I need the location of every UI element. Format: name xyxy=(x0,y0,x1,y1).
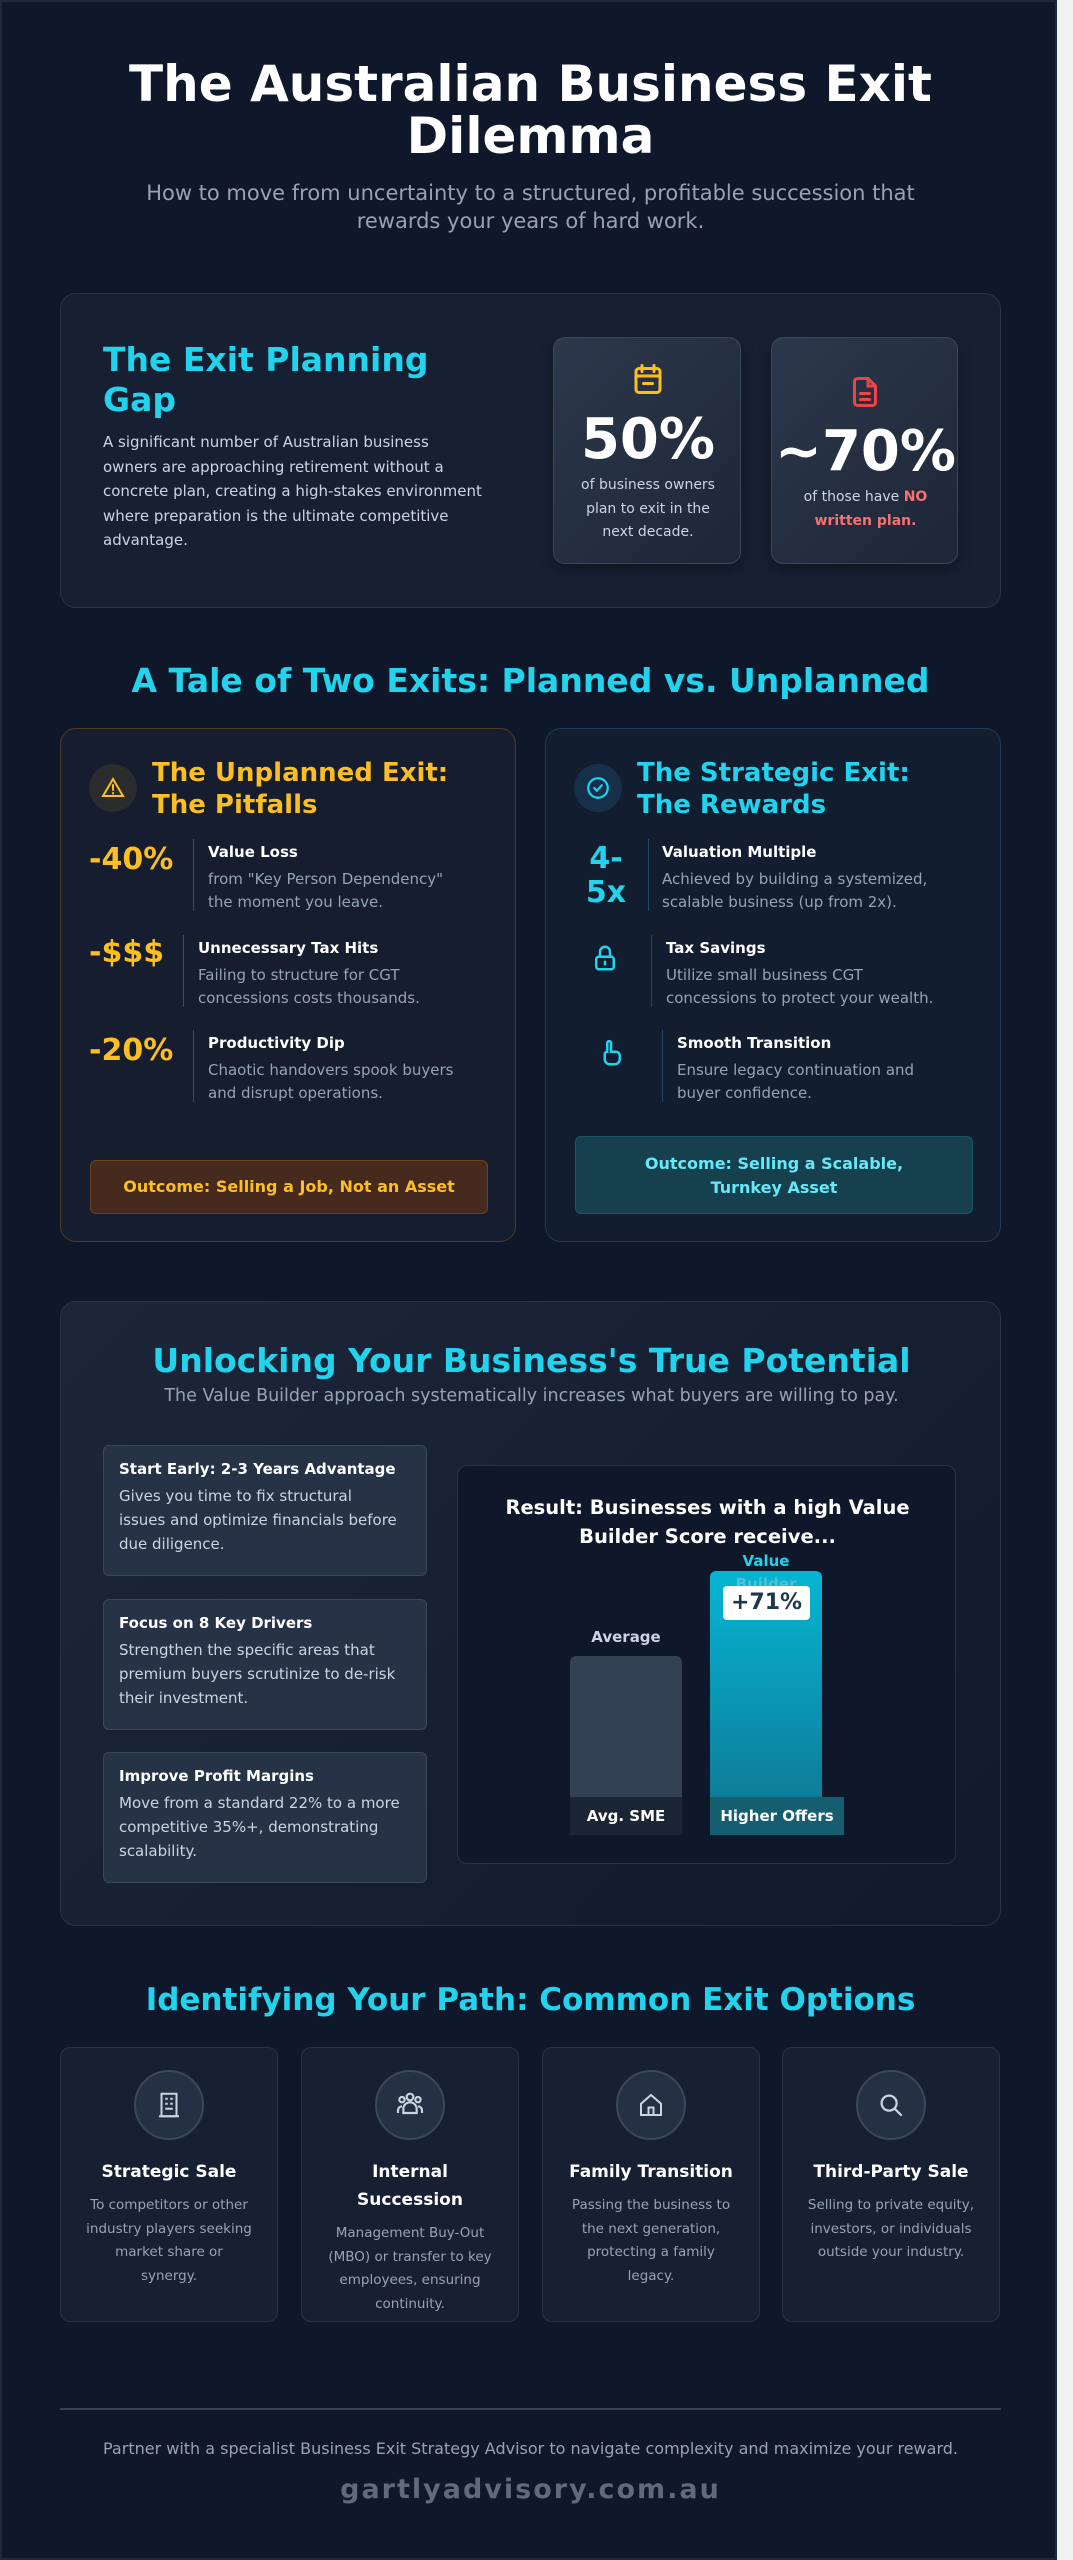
heading: exit planning gap: The Exit Planning xyxy=(103,340,428,379)
card: internal succession: Management Buy-Out (MBO) or transfer to key employees, ensuring continuity. xyxy=(328,2225,492,2312)
callout: outcome unplanned xyxy=(90,1160,488,1214)
card: key drivers: Strengthen the specific areas that premium buyers scrutinize to de-risk their investment. xyxy=(119,1641,395,1707)
item: value loss: Value Loss xyxy=(208,843,298,861)
item: valuation multiple: 4- xyxy=(589,841,623,876)
title: The Australian Business Exit xyxy=(129,55,932,113)
stat card: ~70%: ~70% xyxy=(775,419,956,484)
icon: calendar xyxy=(634,364,662,394)
heading: exit options: Identifying Your Path: Common Exit Options xyxy=(146,1982,915,2018)
card: third-party sale: investors, or individuals xyxy=(810,2221,972,2237)
card: third-party sale: Third-Party Sale xyxy=(813,2162,969,2182)
card: profit margins: Move from a standard 22% to a more competitive 35%+, demonstrating scalability. xyxy=(119,1794,400,1860)
item: tax hits xyxy=(89,935,420,1007)
card: strategic sale: To competitors or other industry players seeking market share or synergy. xyxy=(86,2197,252,2284)
heading: strategic xyxy=(637,758,910,820)
card: start early xyxy=(103,1445,427,1576)
card: third-party sale xyxy=(782,2047,1000,2322)
chart title: Builder Score receive... xyxy=(579,1525,836,1548)
item: tax hits: Unnecessary Tax Hits xyxy=(198,939,378,957)
chart title: Result: Businesses with a high Value xyxy=(505,1496,910,1519)
chart: value builder bar chart: Value xyxy=(743,1552,789,1570)
bar: value builder: +71% xyxy=(731,1590,802,1615)
text: gap description: advantage. xyxy=(103,531,188,549)
item: valuation multiple: 5x xyxy=(586,875,626,910)
card: key drivers xyxy=(103,1599,427,1730)
card: family transition xyxy=(542,2047,760,2322)
item: tax savings xyxy=(595,935,933,1007)
item: productivity dip: Chaotic handovers spook buyers and disrupt operations. xyxy=(208,1061,453,1102)
heading: strategic: The Rewards xyxy=(637,790,826,820)
item: tax savings: Tax Savings xyxy=(666,939,766,957)
card: start early: Start Early: 2-3 Years Advantage xyxy=(119,1460,396,1478)
icon: check xyxy=(574,764,622,812)
text: gap description xyxy=(103,433,482,549)
card: family transition: Family Transition xyxy=(569,2162,733,2182)
callout: outcome strategic xyxy=(575,1136,973,1214)
item: smooth transition: Ensure legacy continuation and buyer confidence. xyxy=(677,1061,914,1102)
item: tax savings: Utilize small business CGT concessions to protect your wealth. xyxy=(666,966,933,1007)
title: Dilemma xyxy=(407,107,654,165)
bar: average: Avg. SME xyxy=(587,1807,665,1825)
card: internal succession: Internal Succession xyxy=(357,2162,463,2210)
item: productivity dip: Productivity Dip xyxy=(208,1034,345,1052)
panel: strategic exit xyxy=(545,728,1001,1242)
panel: unlocking potential xyxy=(60,1301,1001,1926)
card: third-party sale: Selling to private equity, xyxy=(808,2197,974,2213)
icon: document xyxy=(853,377,877,407)
panel: unplanned exit xyxy=(60,728,516,1242)
card: profit margins: Improve Profit Margins xyxy=(119,1767,314,1785)
text: gap description: A significant number of Australian business xyxy=(103,433,429,451)
heading: strategic: The Strategic Exit: xyxy=(637,758,910,788)
text: gap description: owners are approaching retirement without a xyxy=(103,458,444,476)
icon: house xyxy=(616,2070,686,2140)
bar: value builder xyxy=(710,1552,844,1835)
title xyxy=(129,55,932,165)
item: productivity dip xyxy=(89,1030,453,1102)
callout: outcome unplanned: Outcome: Selling a Job, Not an Asset xyxy=(123,1177,455,1196)
callout: outcome strategic: Outcome: Selling a Scalable, xyxy=(645,1154,903,1173)
item: tax hits: Failing to structure for CGT concessions costs thousands. xyxy=(198,966,420,1007)
stat card: ~70% xyxy=(771,337,958,564)
bar: value builder: Higher Offers xyxy=(720,1807,834,1825)
footer text: Partner with a specialist Business Exit Strategy Advisor to navigate complexity and maximize your reward. xyxy=(103,2439,958,2458)
card: strategic sale: Strategic Sale xyxy=(102,2162,236,2182)
subtitle: value builder: The Value Builder approach systematically increases what buyers are willing to pay. xyxy=(164,1386,899,1406)
item: valuation multiple: Valuation Multiple xyxy=(662,843,816,861)
icon: search xyxy=(856,2070,926,2140)
bar: value builder: Builder xyxy=(736,1575,796,1593)
heading: tale of two exits: A Tale of Two Exits: Planned vs. Unplanned xyxy=(132,661,929,700)
card: start early: Gives you time to fix structural issues and optimize financials before due diligence. xyxy=(119,1487,397,1553)
icon: people xyxy=(375,2070,445,2140)
text: gap description: where preparation is the ultimate competitive xyxy=(103,506,449,524)
item: value loss: from "Key Person Dependency" the moment you leave. xyxy=(208,870,443,911)
item: tax hits: -$$$ xyxy=(89,935,164,970)
item: value loss: -40% xyxy=(89,842,173,877)
chart: value builder bar chart xyxy=(457,1465,956,1864)
panel: exit planning gap xyxy=(60,293,1001,608)
heading: unplanned: The Unplanned Exit: xyxy=(152,758,448,788)
card: third-party sale: outside your industry. xyxy=(818,2244,964,2260)
heading: unplanned xyxy=(152,758,448,820)
heading: exit planning gap xyxy=(103,340,428,419)
item: smooth transition: Smooth Transition xyxy=(677,1034,831,1052)
callout: outcome strategic: Turnkey Asset xyxy=(711,1178,837,1197)
card: family transition: Passing the business to the next generation, protecting a family legacy. xyxy=(572,2197,730,2284)
stat card: 50% xyxy=(553,337,741,564)
footer url: gartlyadvisory.com.au xyxy=(340,2474,721,2505)
card: key drivers: Focus on 8 Key Drivers xyxy=(119,1614,312,1632)
stat card: 50%: of business owners plan to exit in the next decade. xyxy=(581,477,715,540)
heading: exit planning gap: Gap xyxy=(103,380,176,419)
subtitle xyxy=(146,181,915,233)
chart: value builder bar chart: Average xyxy=(591,1628,661,1646)
item: productivity dip: -20% xyxy=(89,1033,173,1068)
item: valuation multiple: Achieved by building a systemized, scalable business (up from 2x). xyxy=(662,870,927,911)
stat card: ~70%: of those have NO written plan. xyxy=(804,489,927,528)
icon: building xyxy=(134,2070,204,2140)
item: value loss xyxy=(89,839,443,911)
subtitle: How to move from uncertainty to a structured, profitable succession that xyxy=(146,181,915,205)
card: internal succession xyxy=(301,2047,519,2322)
card: strategic sale xyxy=(60,2047,278,2322)
text: gap description: concrete plan, creating a high-stakes environment xyxy=(103,482,482,500)
chart title xyxy=(505,1496,910,1548)
heading: unplanned: The Pitfalls xyxy=(152,790,317,820)
stat card: 50%: 50% xyxy=(581,407,715,472)
heading: unlocking potential: Unlocking Your Business's True Potential xyxy=(152,1341,911,1380)
item: valuation multiple xyxy=(586,839,927,911)
bar: average xyxy=(570,1628,682,1835)
subtitle: rewards your years of hard work. xyxy=(357,209,704,233)
item: smooth transition xyxy=(604,1030,914,1102)
icon: warning xyxy=(89,764,137,812)
card: profit margins xyxy=(103,1752,427,1883)
